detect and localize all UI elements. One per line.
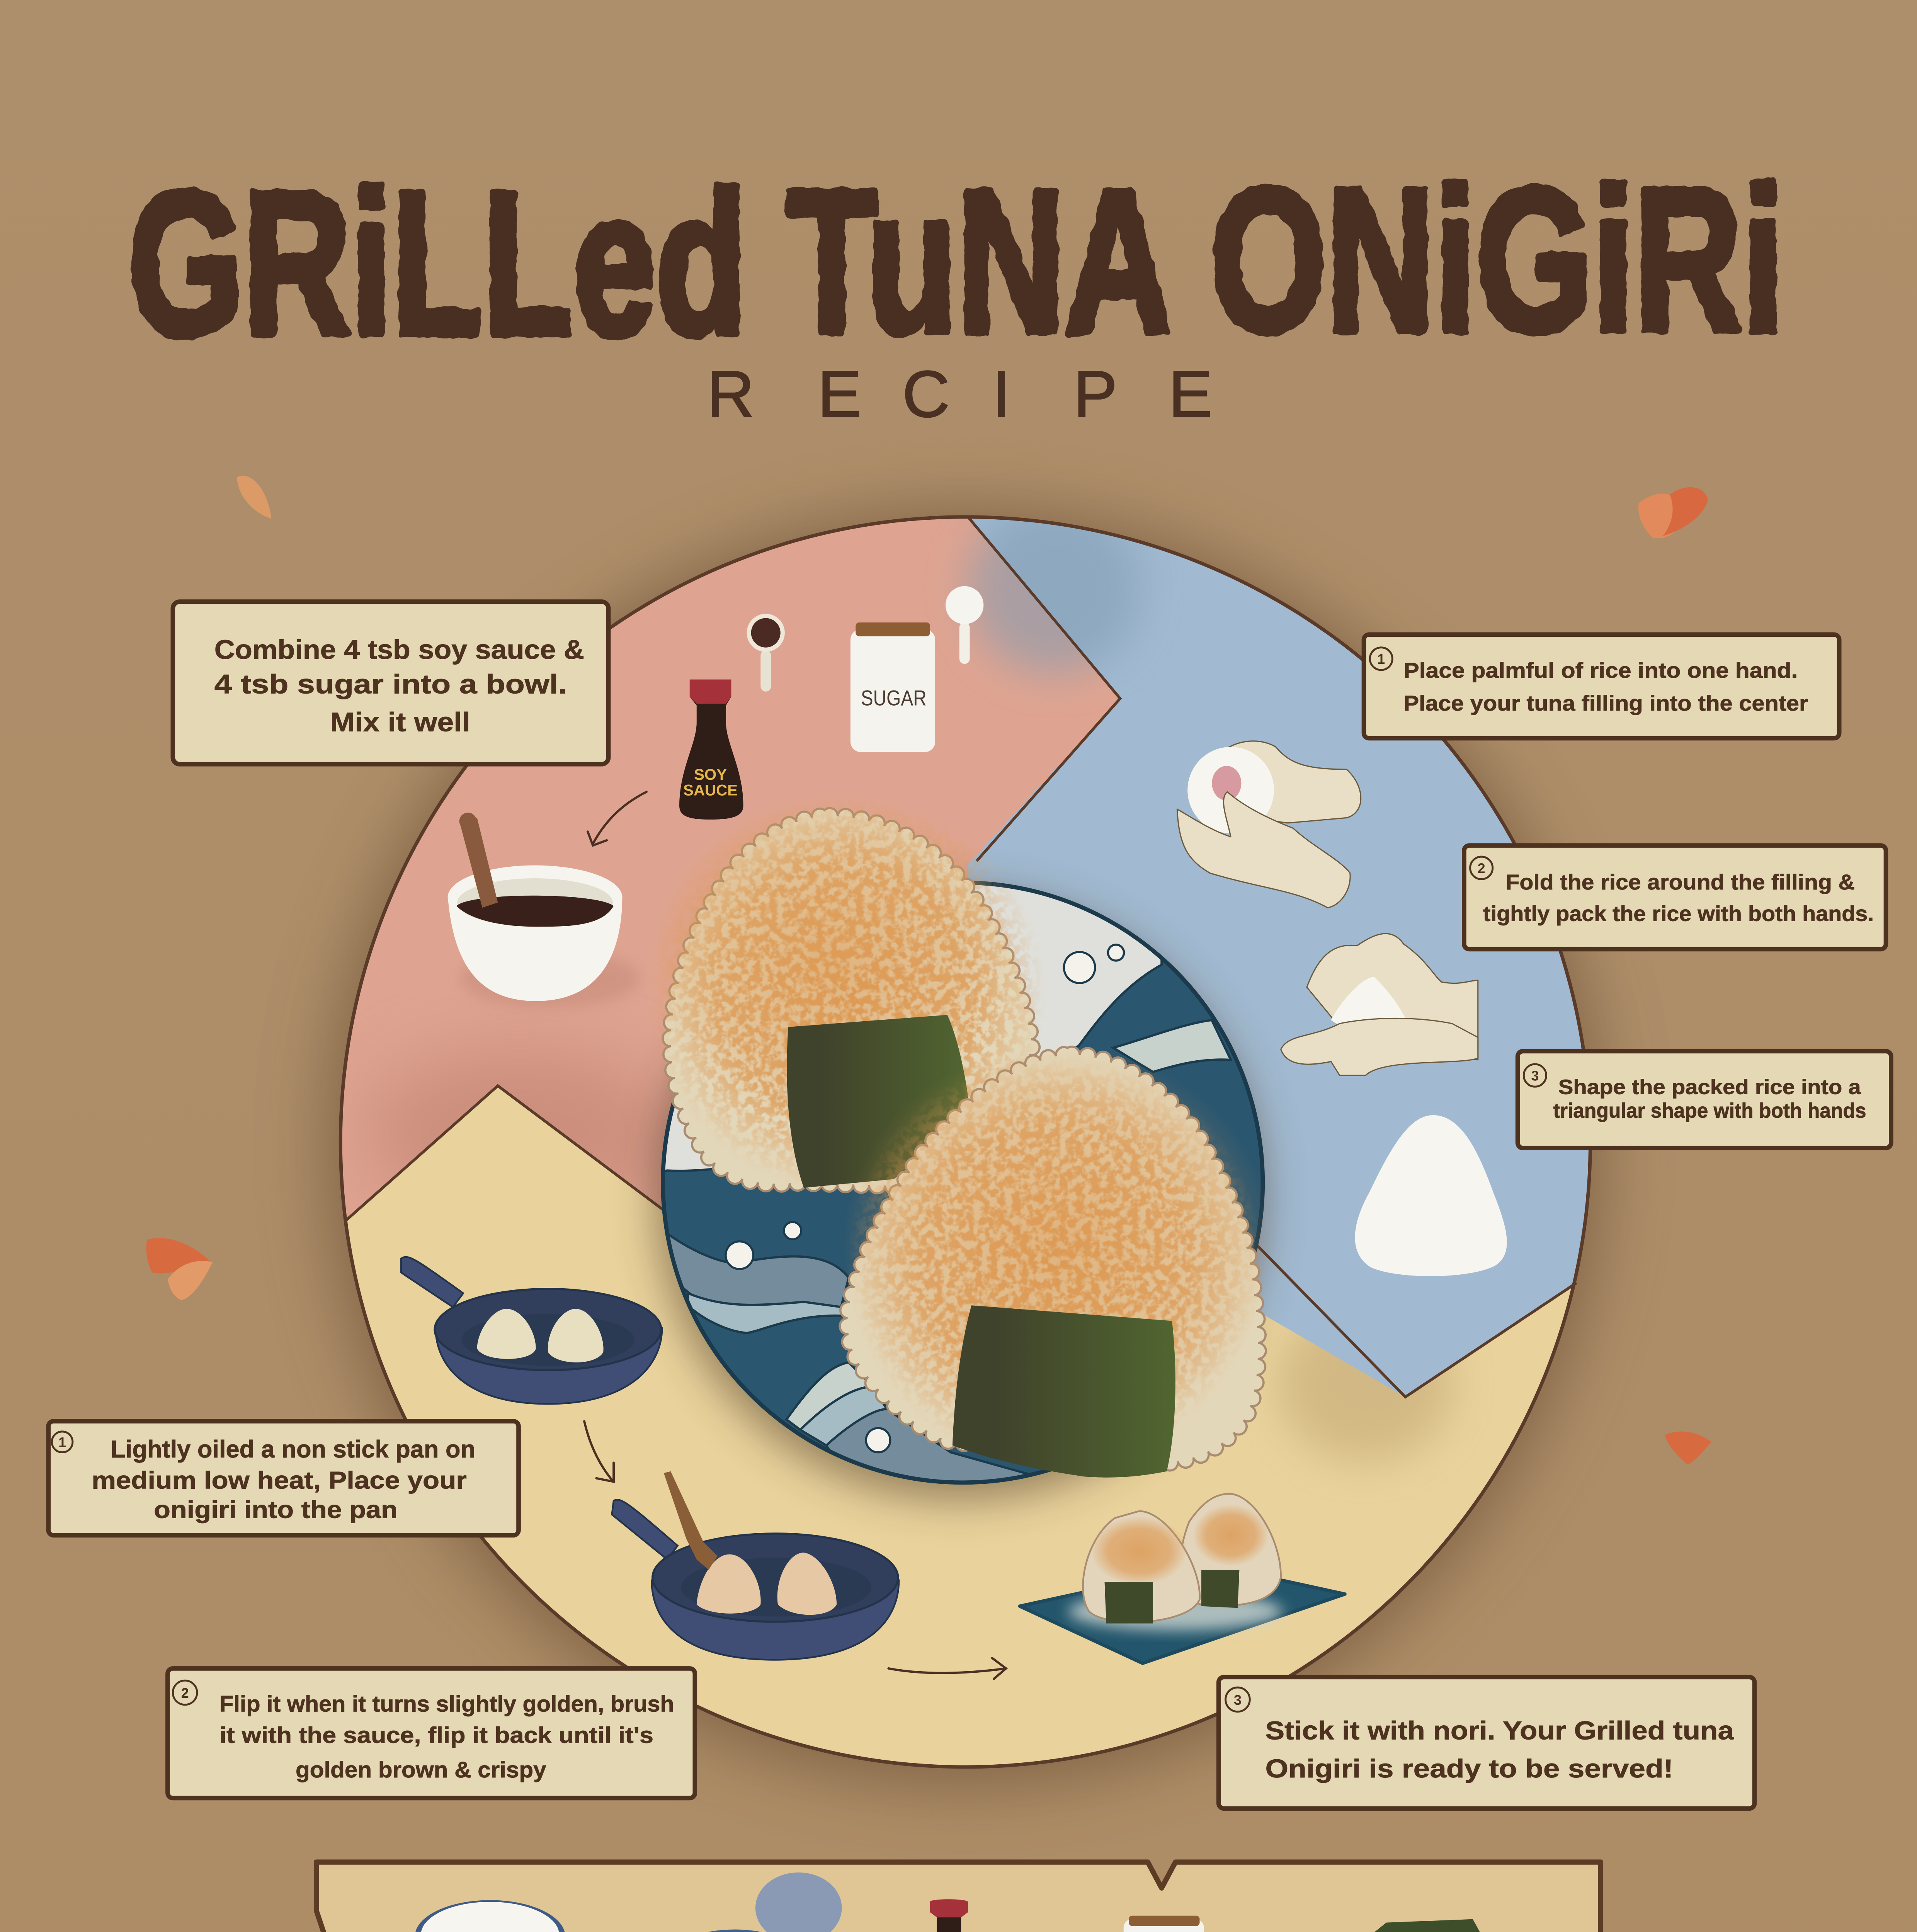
icon: pan with plain onigiri	[401, 1257, 662, 1404]
title	[128, 146, 1784, 377]
callout: combine sauce: Mix it well	[330, 707, 470, 737]
icon: soy spoon	[747, 614, 785, 692]
icon: pan with brush	[612, 1471, 899, 1660]
icon: soy sauce bottle: SOY	[694, 766, 727, 783]
icon: hands holding rice	[1177, 741, 1361, 908]
callout: frying step 2: 2	[181, 1685, 189, 1701]
callout: frying step 1: 1	[58, 1435, 66, 1450]
arrow: to bowl	[588, 792, 646, 845]
callout: frying step 2	[168, 1668, 695, 1798]
callout: frying step 2: it with the sauce, flip it back until it's	[219, 1723, 653, 1748]
callout: combine sauce: Combine 4 tsb soy sauce &	[214, 634, 584, 665]
icon: soy sauce bottle	[679, 679, 743, 820]
step: sauce ingredients	[448, 586, 983, 1008]
callout: shaping step 2: 2	[1478, 861, 1485, 876]
callout: shaping step 3: Shape the packed rice into a	[1558, 1075, 1861, 1099]
plate bubbles	[726, 945, 1124, 1452]
recipe wheel	[299, 482, 1630, 1814]
icon: sugar jar	[850, 622, 935, 752]
plate rim	[663, 883, 1263, 1483]
icon: sauce bowl	[448, 813, 640, 1008]
step: shaping hands	[1177, 741, 1507, 1276]
step: frying	[401, 1257, 1345, 1679]
plate wave bands	[640, 864, 1231, 1504]
segment divider lines	[346, 517, 1577, 1397]
title: GRiLLed	[128, 149, 747, 377]
icon: sugar jar: SUGAR	[861, 686, 927, 710]
wheel segment: blue shaping	[964, 346, 1728, 1397]
panel: ingredients	[316, 1862, 1601, 1932]
title: TuNA	[786, 147, 1172, 375]
callout: serving step 3: Onigiri is ready to be served!	[1266, 1754, 1673, 1783]
wheel segment: pink sauce	[173, 415, 1120, 1236]
callout: frying step 2: Flip it when it turns slightly golden, brush	[219, 1692, 674, 1717]
callout: shaping step 1: Place palmful of rice into one hand.	[1403, 658, 1798, 682]
callout: shaping step 2: tightly pack the rice with both hands.	[1483, 901, 1874, 926]
icon: rice bowl	[415, 1900, 565, 1932]
wheel outline	[340, 517, 1590, 1767]
wheel base: yellow cooking segment	[340, 517, 1590, 1767]
icon: shaped rice ball	[1355, 1115, 1507, 1276]
wheel shadow	[328, 512, 1601, 1784]
callout: shaping step 3: triangular shape with both hands	[1553, 1099, 1866, 1122]
callout: serving step 3: Stick it with nori. Your Grilled tuna	[1266, 1716, 1734, 1745]
icon: sugar spoon	[946, 586, 983, 664]
icon: hands packing rice	[1281, 934, 1478, 1075]
icon: tuna can	[670, 1872, 842, 1932]
plate shadow	[655, 892, 1264, 1501]
callout: frying step 2: golden brown & crispy	[296, 1757, 546, 1782]
callout: serving step 3: 3	[1234, 1692, 1242, 1708]
callout: shaping step 1	[1364, 634, 1839, 738]
callout: frying step 1	[48, 1421, 519, 1535]
callout: combine sauce	[173, 602, 609, 764]
ingredients panel background	[316, 1862, 1601, 1932]
callout: frying step 1: Lightly oiled a non stick pan on	[111, 1436, 475, 1463]
callout: serving step 3	[1219, 1677, 1755, 1808]
petal: top left	[237, 476, 271, 519]
plate base	[663, 883, 1263, 1483]
icon: serving plate with onigiri	[1020, 1494, 1345, 1663]
callout: shaping step 3	[1518, 1051, 1891, 1148]
petal: right	[1665, 1432, 1711, 1464]
icon: soy bottle	[921, 1899, 975, 1932]
nori: back	[787, 1015, 968, 1188]
callout: shaping step 3: 3	[1531, 1068, 1539, 1084]
icon: nori on dish	[1333, 1919, 1514, 1932]
arrow: down to second pan	[584, 1421, 614, 1482]
callout: shaping step 2: Fold the rice around the filling &	[1505, 870, 1855, 894]
callout: frying step 1: onigiri into the pan	[154, 1497, 398, 1524]
nori: front	[953, 1305, 1175, 1478]
arrow: to serving plate	[888, 1658, 1006, 1679]
subtitle: recipe: RECIPE	[707, 357, 1212, 431]
petal: top right	[1638, 487, 1708, 538]
onigiri: front	[842, 1046, 1274, 1478]
plate with waves	[640, 864, 1264, 1504]
icon: soy sauce bottle: SAUCE	[683, 781, 738, 799]
icon: sugar jar small	[1124, 1916, 1204, 1932]
callout: frying step 1: medium low heat, Place your	[92, 1467, 467, 1494]
callout: shaping step 1: 1	[1377, 651, 1385, 667]
callout: shaping step 2	[1464, 845, 1886, 949]
callout: combine sauce: 4 tsb sugar into a bowl.	[214, 669, 567, 699]
callout: shaping step 1: Place your tuna filling into the center	[1403, 691, 1808, 715]
onigiri: back	[648, 795, 1046, 1193]
yellow segment edge shade	[328, 1086, 1728, 1902]
petal: left	[146, 1238, 213, 1300]
